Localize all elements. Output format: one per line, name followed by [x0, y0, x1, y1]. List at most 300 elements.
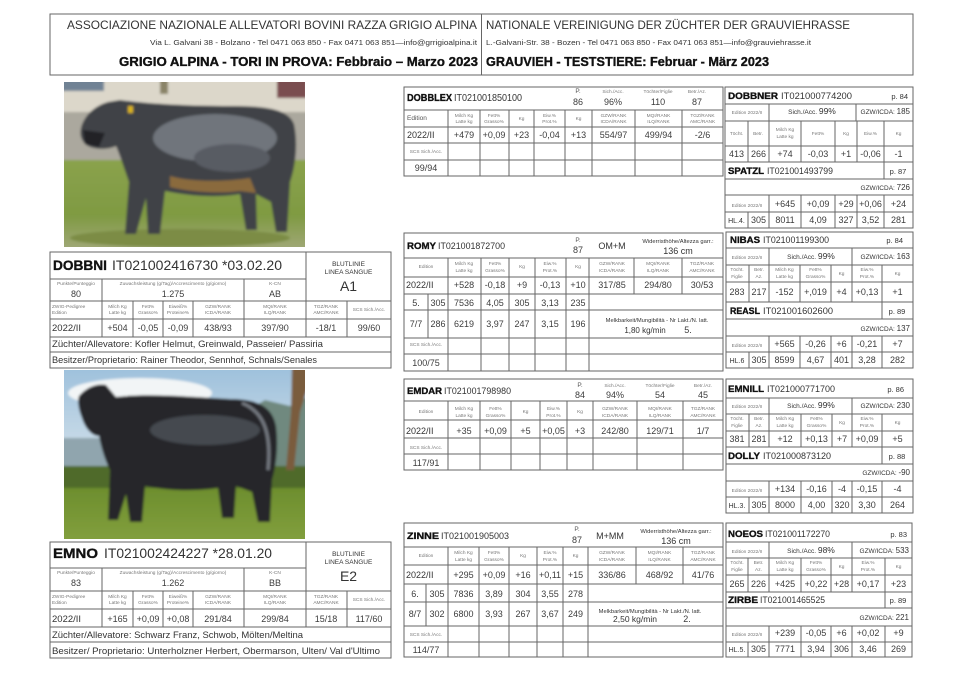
- panel: Emdar: 45: [698, 390, 708, 400]
- panel: Zinne: Eiw.%: [543, 550, 557, 556]
- panel: Nibas and Reasl: Edition 2022/II: [732, 343, 762, 349]
- panel: Zinne: +15: [568, 570, 583, 580]
- panel: Emnill and Dolly: +134: [775, 484, 795, 494]
- panel: Zinne: +16: [515, 570, 531, 580]
- panel: Emdar: 84: [575, 390, 585, 400]
- table: Dobbni pedigree card: ILQ/RANK: [264, 310, 287, 316]
- panel: Emnill and Dolly: Latte kg: [776, 423, 794, 429]
- panel: Emnill and Dolly: 4,00: [808, 500, 825, 510]
- panel: Emdar: 242/80: [601, 426, 629, 436]
- table: Emno pedigree card: Zuwachsleistung (g/Tag)/Accrescimento (g/giorno): [120, 570, 227, 576]
- panel: Romy: Fett%: [489, 261, 502, 267]
- panel: Nibas and Reasl: Prot.%: [860, 274, 875, 280]
- panel: Emdar: 1/7: [697, 426, 709, 436]
- panel: Noeos and Zirbe: Sich./Acc. 98%: [787, 545, 835, 555]
- panel: Dobbner and Spatzl: +0,06: [859, 199, 882, 209]
- table: Dobbni pedigree card: -0,09: [168, 323, 188, 333]
- panel: Zinne: 41/76: [692, 570, 714, 580]
- panel: Noeos and Zirbe: p. 83: [890, 530, 907, 539]
- panel: Emnill and Dolly: Fett%: [810, 416, 823, 422]
- table: Emno pedigree card: AMC/RANK: [313, 600, 339, 606]
- panel: Emdar: Kg: [523, 409, 529, 415]
- panel: Noeos and Zirbe: +0,02: [857, 628, 879, 638]
- owner Emno: Besitzer/ Proprietario: Unterholzner Herbert, Obermarson, Ulten/ Val d'Ultimo: [52, 646, 380, 657]
- panel: Noeos and Zirbe: Figlie: [731, 567, 743, 573]
- name Dobbner: DOBBNER: [728, 91, 778, 102]
- panel: Romy: +528: [454, 280, 474, 290]
- id Dobbner: IT021000774200: [781, 91, 852, 102]
- panel: Nibas and Reasl: Figlie: [731, 274, 743, 280]
- panel: Nibas and Reasl: +7: [892, 339, 903, 349]
- panel: Romy: -0,13: [540, 280, 560, 290]
- table: Emno pedigree card: Grasso%: [138, 600, 159, 606]
- panel: Dobbner and Spatzl: Edition 2022/II: [732, 203, 762, 209]
- panel: Emnill and Dolly: Edition 2022/II: [732, 404, 762, 410]
- panel: Emnill and Dolly: GZW/ICDA: -90: [862, 468, 911, 477]
- panel: Noeos and Zirbe: Kg: [839, 564, 845, 570]
- panel: Dobbner and Spatzl: +74: [777, 149, 793, 159]
- panel: Nibas and Reasl: Kg: [895, 271, 901, 277]
- table: Emno pedigree card: 15/18: [315, 614, 337, 624]
- panel: Romy: 7/7: [410, 319, 422, 329]
- panel: Nibas and Reasl: 283: [729, 287, 745, 297]
- panel: Dobblex: +479: [454, 130, 474, 140]
- panel: Zinne: 267: [515, 609, 531, 619]
- panel: Romy: +10: [570, 280, 586, 290]
- panel: Dobbner and Spatzl: Sich./Acc. 99%: [788, 106, 836, 116]
- panel: Noeos and Zirbe: Töcht.: [730, 560, 744, 566]
- panel: Emnill and Dolly: GZW/ICDA: 230: [861, 401, 911, 410]
- table: Dobbni pedigree card: Zuwachsleistung (g/Tag)/Accrescimento (g/giorno): [120, 281, 227, 287]
- breeder Dobbni: Züchter/Allevatore: Kofler Helmut, Greinwald, Passeier/ Passiria: [52, 339, 324, 350]
- panel: Romy: 3,15: [541, 319, 559, 329]
- panel: Zinne: ILQ/RANK: [648, 557, 671, 563]
- header band: [50, 14, 913, 75]
- panel: Noeos and Zirbe: +6: [836, 628, 847, 638]
- table: Dobbni pedigree card: AMC/RANK: [313, 310, 339, 316]
- panel: Nibas and Reasl: 305: [751, 355, 767, 365]
- name Nibas: NIBAS: [730, 235, 760, 246]
- panel: Zinne: 2022/II: [406, 570, 434, 580]
- panel: Romy: 305: [430, 298, 446, 308]
- panel: Dobblex: 87: [692, 97, 702, 107]
- panel: Noeos and Zirbe: -0,05: [806, 628, 826, 638]
- panel: Nibas and Reasl: Fett%: [809, 267, 822, 273]
- table: Emno pedigree card: +0,09: [137, 614, 159, 624]
- panel: Dobblex: TGZ/RANK: [690, 113, 715, 119]
- panel: Romy: AMC/RANK: [689, 268, 715, 274]
- id Zirbe: IT021001465525: [760, 595, 825, 606]
- panel: Zinne: 6.: [411, 589, 419, 599]
- panel: Romy: OM+M: [598, 241, 626, 251]
- panel: Zinne: Kg: [573, 553, 579, 559]
- panel: Emnill and Dolly: +12: [777, 434, 793, 444]
- panel: Emnill and Dolly: -4: [893, 484, 902, 494]
- panel: Noeos and Zirbe: +23: [891, 579, 906, 589]
- table: Emno pedigree card: BB: [269, 578, 281, 588]
- panel: Dobblex: -0,04: [539, 130, 560, 140]
- panel: Zinne: 3,67: [541, 609, 559, 619]
- panel: Dobbner and Spatzl: 4,09: [809, 215, 827, 225]
- panel: Emnill and Dolly: 381: [729, 434, 745, 444]
- id Dolly: IT021000873120: [763, 451, 831, 462]
- table: Emno pedigree card: 83: [71, 578, 81, 588]
- table: Dobbni pedigree card: 99/60: [358, 323, 380, 333]
- table: Dobbni pedigree card: Grasso%: [138, 310, 159, 316]
- panel: Dobblex: Milch Kg: [455, 113, 474, 119]
- title: italian: GRIGIO ALPINA - TORI IN PROVA: Febbraio – Marzo 2023: [119, 55, 478, 69]
- name Emnill: EMNILL: [728, 384, 764, 395]
- panel: Noeos and Zirbe: 269: [891, 644, 906, 654]
- panel: Dobblex: Latte kg: [455, 119, 473, 125]
- table: Emno pedigree card: Latte kg: [109, 600, 126, 606]
- panel: Romy: 136 cm: [663, 246, 693, 256]
- panel: Zinne: 304: [515, 589, 531, 599]
- panel: Emnill and Dolly: 281: [751, 434, 767, 444]
- panel: Emnill and Dolly: +0,13: [805, 434, 828, 444]
- panel: Zinne: 2,50 kg/min: [613, 614, 657, 624]
- panel: Nibas and Reasl: Edition 2022/II: [732, 255, 762, 261]
- panel: Dobblex: 110: [651, 97, 665, 107]
- panel: Emdar: 117/91: [413, 458, 439, 468]
- panel: Dobbner and Spatzl: Kg: [843, 131, 849, 137]
- name Emdar: EMDAR: [407, 386, 442, 397]
- header: italian address: Via L. Galvani 38 - Bolzano - Tel 0471 063 850 - Fax 0471 063 851—info@grrigioalpina.it: [150, 38, 478, 47]
- name Reasl: REASL: [730, 306, 760, 317]
- panel: Romy: -0,18: [485, 280, 505, 290]
- panel: Romy: SCS Sich./Acc.: [410, 342, 442, 348]
- panel: Emnill and Dolly: Grasso%: [807, 423, 827, 429]
- panel: Emnill and Dolly: Prot.%: [860, 423, 875, 429]
- panel: Zinne: Latte kg: [455, 557, 472, 563]
- panel: Nibas and Reasl: +565: [774, 339, 795, 349]
- panel: Emdar: Grasso%: [486, 413, 506, 419]
- panel: Noeos and Zirbe: Latte kg: [776, 567, 794, 573]
- panel: Emnill and Dolly: Betr.: [754, 416, 764, 422]
- id Nibas: IT021001199300: [763, 235, 829, 246]
- panel: Nibas and Reasl: Eiw.%: [860, 267, 874, 273]
- panel: Noeos and Zirbe: 226: [751, 579, 766, 589]
- id Spatzl: IT021001493799: [767, 166, 833, 177]
- panel: Romy: 247: [514, 319, 530, 329]
- panel: Emnill and Dolly: Figlie: [731, 423, 743, 429]
- panel: Emdar: TGZ/RANK: [691, 406, 716, 412]
- panel: Romy: Kg: [519, 264, 525, 270]
- panel: Romy: GZW/RANK: [599, 261, 626, 267]
- panel: Noeos and Zirbe: Eiw.%: [861, 560, 875, 566]
- panel: Zinne: 3,89: [485, 589, 503, 599]
- panel: Emdar: [404, 379, 723, 470]
- panel: Romy: 1,80 kg/min: [624, 326, 666, 335]
- table: Emno pedigree card: GZW/RANK: [205, 594, 232, 600]
- table: Emno pedigree card: ILQ/RANK: [264, 600, 287, 606]
- name Zinne: ZINNE: [407, 531, 439, 542]
- panel: Romy: 2022/II: [406, 280, 434, 290]
- table: Emno pedigree card: +165: [107, 614, 128, 624]
- panel: Romy: 196: [570, 319, 586, 329]
- panel: Romy: TGZ/RANK: [690, 261, 715, 267]
- panel: Romy: 286: [430, 319, 446, 329]
- panel: Nibas and Reasl: p. 84: [886, 236, 903, 245]
- panel: Emdar: Betr./Az.: [694, 383, 712, 389]
- panel: Noeos and Zirbe: +239: [775, 628, 795, 638]
- panel: Emnill and Dolly: Kg: [839, 420, 845, 426]
- panel: Emnill and Dolly: 320: [834, 500, 850, 510]
- table: Emno pedigree card: 291/84: [204, 614, 232, 624]
- id Zinne: IT021001905003: [441, 531, 509, 542]
- panel: Zinne: 8/7: [409, 609, 421, 619]
- panel: Dobbner and Spatzl: -1: [894, 149, 903, 159]
- panel: Nibas and Reasl: Sich./Acc. 99%: [787, 251, 835, 261]
- table: Dobbni pedigree card: Latte kg: [109, 310, 126, 316]
- panel: Noeos and Zirbe: +0,17: [857, 579, 879, 589]
- name Dobblex: DOBBLEX: [407, 92, 452, 104]
- panel: Noeos and Zirbe: 3,46: [859, 644, 877, 654]
- panel: Zinne: 3,93: [485, 609, 503, 619]
- panel: Noeos and Zirbe: 305: [751, 644, 766, 654]
- table: Dobbni pedigree card: A1: [340, 278, 357, 294]
- panel: Emdar: Milch Kg: [455, 406, 474, 412]
- panel: Nibas and Reasl: +0,13: [856, 287, 878, 297]
- table: Dobbni pedigree card: TGZ/RANK: [314, 304, 339, 310]
- panel: Emdar: Fett%: [489, 406, 502, 412]
- panel: Romy: ILQ/RANK: [647, 268, 670, 274]
- owner Dobbni: Besitzer/Proprietario: Rainer Theodor, Sennhof, Schnals/Senales: [52, 355, 317, 366]
- panel: Romy: 7536: [454, 298, 474, 308]
- panel: Dobblex: MQI/RANK: [647, 113, 671, 119]
- panel: Dobblex: SCS Sich./Acc.: [410, 149, 442, 155]
- table: Emno pedigree card: ICDA/RANK: [205, 600, 232, 606]
- panel: Nibas and Reasl: Latte kg: [776, 274, 793, 280]
- panel: Emdar: 94%: [606, 390, 624, 400]
- panel: Dobbner and Spatzl: +1: [841, 149, 851, 159]
- id Emno: IT021002424227 *28.01.20: [104, 545, 272, 561]
- panel: Emnill and Dolly: Az.: [756, 423, 762, 429]
- panel: Zinne: Grasso%: [484, 557, 505, 563]
- panel: Romy: 305: [514, 298, 530, 308]
- panel: Dobblex: -2/6: [695, 130, 710, 140]
- panel: Noeos and Zirbe: 3,94: [807, 644, 825, 654]
- table: Emno pedigree card: Milch Kg: [108, 594, 127, 600]
- panel: Nibas and Reasl: -152: [775, 287, 794, 297]
- panel: Noeos and Zirbe: Fett%: [810, 560, 823, 566]
- table: Emno pedigree card: Proteine%: [167, 600, 190, 606]
- panel: Emdar: Edition: [419, 409, 434, 415]
- panel: Noeos and Zirbe: Kg: [896, 564, 902, 570]
- table: Emno pedigree card: 2022/II: [52, 614, 81, 625]
- panel: Nibas and Reasl: -0,21: [857, 339, 877, 349]
- panel: Nibas and Reasl: GZW/ICDA: 137: [861, 324, 911, 333]
- panel: Dobblex: 86: [573, 97, 583, 107]
- table: Emno pedigree card: Punkte/Punteggio: [57, 570, 95, 576]
- table: Dobbni pedigree card: 438/93: [204, 323, 232, 333]
- milkability Romy: Melkbarkeit/Mungibilità - Nr Lakt./N. latt.: [606, 318, 709, 324]
- panel: Dobblex: Töchter/Figlie: [643, 89, 673, 95]
- panel: Emnill and Dolly: 8000: [775, 500, 795, 510]
- panel: Dobblex: ICDA/RANK: [600, 119, 627, 125]
- panel: Romy: 100/75: [412, 358, 440, 368]
- panel: Dobblex: 554/97: [600, 130, 627, 140]
- table: Emno pedigree card: ZWIG-Pedigree: [52, 594, 86, 600]
- panel: Emdar: Töchter/Figlie: [645, 383, 675, 389]
- panel: Emnill and Dolly: -4: [838, 484, 846, 494]
- panel: Nibas and Reasl: Milch Kg: [775, 267, 794, 273]
- id Dobblex: IT021001850100: [454, 92, 522, 104]
- table: Dobbni pedigree card: -18/1: [316, 323, 336, 333]
- table: Dobbni pedigree card: 397/90: [261, 323, 289, 333]
- table: Dobbni pedigree card: 80: [71, 289, 81, 299]
- id Emnill: IT021000771700: [767, 384, 835, 395]
- panel: Emnill and Dolly: p. 88: [889, 452, 905, 461]
- bloodline label: BLUTLINIE: [332, 551, 366, 558]
- name Dolly: DOLLY: [728, 451, 761, 462]
- panel: Dobblex: 499/94: [645, 130, 672, 140]
- panel: Dobbner and Spatzl: +24: [891, 199, 906, 209]
- panel: Romy: Grasso%: [485, 268, 506, 274]
- panel: Dobblex: [404, 87, 723, 176]
- panel: Noeos and Zirbe: Az.: [755, 567, 762, 573]
- panel: Nibas and Reasl: 282: [890, 355, 905, 365]
- panel: Nibas and Reasl: p. 89: [889, 307, 905, 316]
- panel: Romy: P.: [575, 237, 581, 244]
- panel: Dobblex: Kg: [519, 116, 525, 122]
- table: Emno pedigree card: 117/60: [356, 614, 382, 624]
- header: german address: L.-Galvani-Str. 38 - Bozen - Tel 0471 063 850 - Fax 0471 063 851—info@grauviehrasse.it: [486, 38, 812, 47]
- panel: Emnill and Dolly: [726, 379, 913, 513]
- panel: Emnill and Dolly: p. 86: [887, 385, 904, 394]
- panel: Dobblex: GZW/RANK: [601, 113, 627, 119]
- table: Dobbni pedigree card: ICDA/RANK: [205, 310, 232, 316]
- panel: Dobbner and Spatzl: +645: [775, 199, 795, 209]
- panel: Nibas and Reasl: +,019: [804, 287, 827, 297]
- table: Dobbni pedigree card: AB: [269, 289, 281, 299]
- table: Emno pedigree card: TGZ/RANK: [314, 594, 339, 600]
- panel: Emdar: 129/71: [646, 426, 674, 436]
- table: Emno pedigree card: +0,08: [167, 614, 189, 624]
- panel: Romy: [404, 233, 723, 371]
- panel: Romy: 5.: [412, 298, 420, 308]
- panel: Dobblex: +13: [571, 130, 586, 140]
- panel: Nibas and Reasl: -0,26: [805, 339, 826, 349]
- panel: Dobbner and Spatzl: -0,03: [808, 149, 828, 159]
- table: Emno pedigree card: [50, 542, 391, 658]
- panel: Dobbner and Spatzl: Milch Kg: [776, 127, 795, 133]
- panel: Dobblex: P.: [575, 88, 581, 95]
- panel: Romy: MQI/RANK: [646, 261, 671, 267]
- panel: Dobbner and Spatzl: Edition 2022/II: [732, 110, 762, 116]
- table: Dobbni pedigree card: Eiweiß%: [169, 304, 188, 310]
- panel: Dobbner and Spatzl: [725, 87, 913, 228]
- panel: Romy: Widerristhöhe/Altezza garr.:: [642, 239, 714, 245]
- panel: Emdar: Prot.%: [546, 413, 561, 419]
- panel: Romy: 3,97: [486, 319, 504, 329]
- id Romy: IT021001872700: [438, 241, 505, 252]
- panel: Dobbner and Spatzl: Eiw.%: [864, 131, 878, 137]
- panel: Emdar: 2022/II: [406, 426, 434, 436]
- panel: Nibas and Reasl: 401: [834, 355, 849, 365]
- panel: Dobbner and Spatzl: +29: [838, 199, 854, 209]
- table: Emno pedigree card: SCS Sich./Acc.: [353, 597, 385, 603]
- name Spatzl: SPATZL: [728, 166, 764, 177]
- panel: Dobblex: Eiw.%: [543, 113, 557, 119]
- panel: Dobblex: Kg: [576, 116, 582, 122]
- table: Emno pedigree card: 299/84: [261, 614, 289, 624]
- panel: Emdar: P.: [577, 382, 583, 389]
- panel: Romy: 5.: [684, 325, 692, 335]
- table: Emno pedigree card: LINEA SANGUE: [325, 559, 373, 566]
- breeder Emno: Züchter/Allevatore: Schwarz Franz, Schwob, Mölten/Meltina: [52, 630, 304, 641]
- table: Dobbni pedigree card: -0,05: [138, 323, 158, 333]
- panel: Romy: Kg: [575, 264, 581, 270]
- panel: Emdar: +0,05: [542, 426, 565, 436]
- panel: Zinne: 114/77: [413, 645, 439, 655]
- panel: Zinne: Kg: [520, 553, 526, 559]
- panel: Emnill and Dolly: Kg: [895, 420, 901, 426]
- panel: Dobblex: Grasso%: [484, 119, 505, 125]
- table: Emno pedigree card: Eiweiß%: [169, 594, 188, 600]
- panel: Zinne: 302: [429, 609, 445, 619]
- panel: Noeos and Zirbe: +425: [775, 579, 795, 589]
- panel: Zinne: MQI/RANK: [648, 550, 672, 556]
- panel: Nibas and Reasl: +4: [836, 287, 847, 297]
- panel: Dobblex: 2022/II: [407, 130, 435, 140]
- table: Dobbni pedigree card: ZWIG-Pedigree: [52, 304, 86, 310]
- panel: Emnill and Dolly: +5: [892, 434, 903, 444]
- panel: Dobblex: +0,09: [483, 130, 505, 140]
- panel: Romy: Prot.%: [543, 268, 558, 274]
- panel: Nibas and Reasl: 4,67: [807, 355, 824, 365]
- panel: Emnill and Dolly: -0,16: [806, 484, 827, 494]
- milkability Zinne: Melkbarkeit/Mungibilità - Nr Lakt./N. latt.: [599, 609, 702, 615]
- panel: Emdar: GZW/RANK: [602, 406, 629, 412]
- photo: bull Emno: [60, 366, 310, 543]
- panel: Zinne: 7836: [453, 589, 474, 599]
- panel: Zinne: 249: [568, 609, 583, 619]
- table: Dobbni pedigree card: Punkte/Punteggio: [57, 281, 95, 287]
- panel: Dobblex: Fett%: [488, 113, 501, 119]
- panel: Emnill and Dolly: HL.3.: [729, 503, 745, 510]
- panel: Romy: Edition: [419, 264, 434, 270]
- panel: Dobbner and Spatzl: 305: [751, 215, 766, 225]
- panel: Zinne: Prot.%: [543, 557, 558, 563]
- panel: Emdar: +35: [456, 426, 472, 436]
- panel: Emnill and Dolly: 305: [751, 500, 767, 510]
- panel: Zinne: Milch Kg: [454, 550, 473, 556]
- panel: Romy: +9: [517, 280, 527, 290]
- name Noeos: NOEOS: [728, 529, 763, 540]
- panel: Zinne: 336/86: [598, 570, 626, 580]
- table: Dobbni pedigree card: 2022/II: [52, 323, 81, 334]
- table: Dobbni pedigree card: +504: [107, 323, 128, 333]
- panel: Zinne: P.: [574, 526, 580, 533]
- header: german association: NATIONALE VEREINIGUNG DER ZÜCHTER DER GRAUVIEHRASSE: [486, 18, 850, 32]
- table: Emno pedigree card: Fett%: [142, 594, 155, 600]
- table: Emno pedigree card: Edition: [52, 600, 67, 606]
- panel: Dobbner and Spatzl: 3,52: [862, 215, 879, 225]
- panel: Emdar: Latte kg: [455, 413, 473, 419]
- title: german: GRAUVIEH - TESTSTIERE: Februar - März 2023: [486, 55, 769, 69]
- table: Dobbni pedigree card: [50, 252, 391, 368]
- panel: Emdar: +0,09: [484, 426, 507, 436]
- panel: Emdar: +5: [520, 426, 531, 436]
- panel: Nibas and Reasl: Betr.: [754, 267, 764, 273]
- panel: Zinne: Widerristhöhe/Altezza garr.:: [640, 529, 712, 535]
- panel: Noeos and Zirbe: [726, 523, 912, 657]
- panel: Romy: ICDA/RANK: [599, 268, 626, 274]
- id Reasl: IT021001602600: [763, 306, 833, 317]
- panel: Nibas and Reasl: Az.: [756, 274, 762, 280]
- panel: Zinne: 2.: [683, 614, 691, 624]
